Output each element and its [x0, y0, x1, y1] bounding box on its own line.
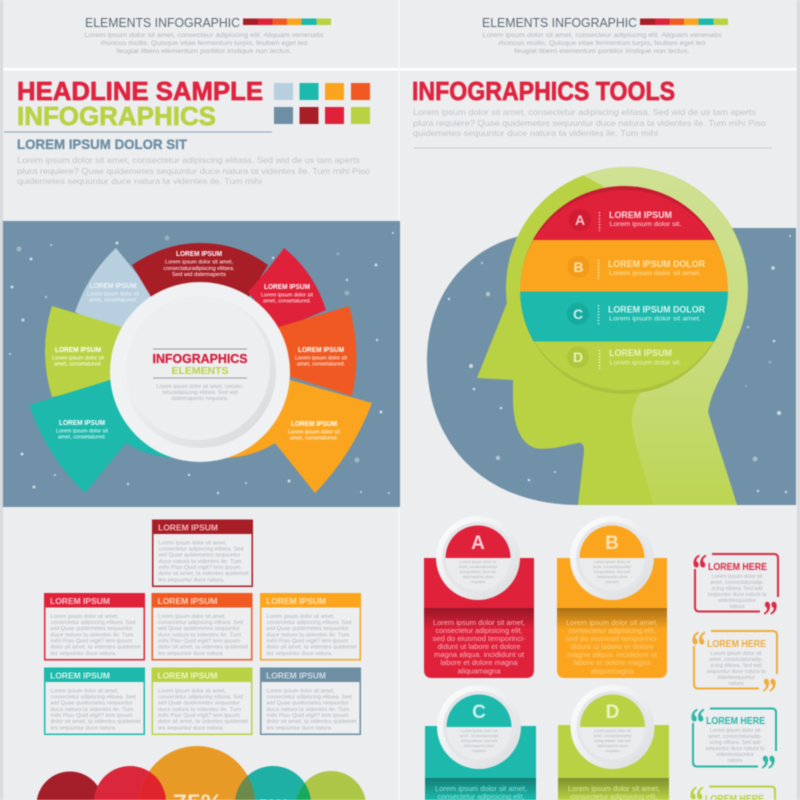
- text box: orange-red: Lorem ipsum dolor sit amet,: [158, 614, 226, 620]
- petal: red: [248, 248, 326, 330]
- text box: red: dolor sit amet, ta videntes quidemet: [50, 645, 141, 651]
- stripe B: Lorem ipsum dolor sit amet.: [609, 270, 701, 277]
- header: right elements infographic: Lorem ipsum dolor sit amet, consecteur adipiscing elit. Aliquam venenatis: [482, 32, 722, 39]
- text box: dark red: Lorem ipsum dolor sit amet,: [158, 540, 226, 546]
- quote box: red: [692, 547, 778, 640]
- header: left elements infographic: ELEMENTS INFOGRAPHIC: [85, 15, 240, 30]
- quote box: teal: ”: [761, 748, 776, 794]
- petal: orange-red: Lorem ipsum dolor sit: [295, 356, 348, 362]
- petal: red: Lorem ipsum dolor sit: [261, 292, 314, 298]
- petal: green: Lorem ipsum dolor sit: [52, 356, 105, 362]
- stripe A: A: [575, 212, 585, 228]
- card C: datemaperts plura: [464, 744, 495, 748]
- text box: red: [44, 593, 145, 660]
- text box: orange-red: duce natura ta videntes ile. Tum: [158, 632, 242, 638]
- centre dial: INFOGRAPHICS: [152, 351, 248, 366]
- petal: dark red: Lorem ipsum dolor sit amet,: [165, 260, 233, 266]
- quote box: red: Lorem ipsum dolor sit: [712, 574, 763, 580]
- centre dial: teturadipiscing elitsea. Sed wid: [162, 390, 238, 396]
- quote box: red: LOREM HERE: [708, 562, 767, 573]
- text box: orange-red: wid Quae quidemetes sequuntur: [158, 626, 240, 632]
- card B: didunt ut labore et dolore: [570, 642, 654, 651]
- stripe A: [569, 209, 682, 231]
- card D: amet, consectaturadipi: [593, 734, 632, 738]
- quote box: teal: scing elitsea. Sed wid: [710, 740, 761, 746]
- text box: red: tes sequuntur duce natura.: [50, 651, 116, 657]
- quote box: teal: sequuntur duce natura ta: [706, 746, 764, 752]
- petal: light blue: Lorem ipsum dolor sit: [87, 292, 140, 298]
- text box: orange: wid Quae quidemetes sequuntur: [266, 626, 349, 632]
- title: headline sample infographics: [17, 78, 263, 131]
- card A: Lorem ipsum dolor sit: [460, 560, 497, 564]
- text box: orange: Lorem ipsum dolor sit amet,: [266, 614, 334, 620]
- quote box: teal: amet, consectaturadip-: [708, 734, 762, 740]
- quote box: orange: amet, consectaturadip-: [709, 657, 763, 663]
- card B: datemaperts plura: [597, 575, 628, 579]
- text box: red: wid Quae quidemetes sequuntur: [50, 626, 133, 632]
- intro text: tools: plura requiere? Quae quidemetes sequuntur duce natura ta videntes ile. Tum mihi Piso: [413, 118, 766, 128]
- petal: teal: Lorem ipsum dolor sit: [56, 428, 109, 434]
- petal: orange-red: LOREM IPSUM: [298, 347, 344, 354]
- card B: scing elitsea. Sed wid: [594, 570, 630, 574]
- card A: amet, consectaturadipi: [459, 565, 497, 569]
- title: headline sample infographics: INFOGRAPHICS: [17, 103, 216, 131]
- intro text: tools: [413, 107, 766, 138]
- text box: green: LOREM IPSUM: [158, 670, 218, 680]
- stripe D: [567, 346, 682, 369]
- petal: red: amet, consetatured.: [263, 298, 311, 304]
- card A: requiara: [471, 580, 486, 584]
- text box: red: Lorem ipsum dolor sit amet,: [50, 614, 118, 620]
- card D: scing elitsea. Sed wid: [594, 739, 631, 743]
- backdrop shape: [427, 228, 796, 505]
- petal: light blue: amet, consetatured.: [89, 298, 137, 304]
- text box: teal: Lorem ipsum dolor sit amet,: [50, 688, 118, 694]
- card A: scing elitsea. Sed wid: [460, 570, 496, 574]
- centre dial: Lorem ipsum dolor sit amet, consec-: [156, 384, 244, 390]
- card C: [425, 685, 536, 800]
- quote box: orange: scing elitsea. Sed wid: [711, 663, 762, 669]
- header: left elements infographic: [84, 15, 331, 55]
- quote box: orange: [691, 624, 777, 717]
- text box: slate: Lorem ipsum dolor sit amet,: [266, 688, 334, 694]
- quote box: red: amet, consectaturadip-: [710, 580, 764, 586]
- quote box: teal: Lorem ipsum dolor sit: [710, 728, 761, 734]
- text box: teal: LOREM IPSUM: [50, 670, 110, 680]
- card A: Lorem ipsum dolor sit amet,: [433, 618, 525, 627]
- text box: dark red: consectetur adipiscing elitsea. Sed: [158, 546, 244, 552]
- text box: dark red: tes sequuntur duce natura.: [158, 577, 224, 583]
- stripe D: Lorem ipsum dolor sit.: [610, 360, 682, 366]
- card B: amet, consectaturadipi: [593, 565, 631, 569]
- stripe C: LOREM IPSUM DOLOR: [608, 304, 705, 314]
- card B: labore et dolore magna: [574, 658, 651, 667]
- quote box: teal: natura: [727, 758, 743, 764]
- subheading and intro text: LOREM IPSUM DOLOR SIT: [17, 136, 187, 152]
- card B: Lorem ipsum dolor sit: [594, 560, 631, 564]
- card C: amet, consectaturadipi: [460, 734, 498, 738]
- colour swatches: [274, 83, 370, 124]
- card A: A: [471, 533, 485, 554]
- centre dial: datemaperts requiara.: [172, 396, 228, 402]
- head silhouette: [477, 167, 748, 505]
- stripe B: B: [573, 259, 584, 275]
- petal: orange: [227, 380, 372, 493]
- petal: teal: [29, 380, 173, 493]
- card D: Lorem ipsum dolor sit: [594, 729, 632, 733]
- card A: sed do eiusmod temporinci-: [432, 634, 526, 643]
- centre dial: ELEMENTS: [172, 366, 229, 377]
- quote box: orange: “: [691, 624, 706, 670]
- petal: dark red: Sed wid datemaperts: [172, 272, 226, 278]
- card A: aliquamagna: [458, 666, 501, 676]
- card B: magna aliqua. incididunt ut: [567, 650, 657, 659]
- card A: consectetur adipisicing elit,: [436, 626, 522, 635]
- petal: orange: LOREM IPSUM: [291, 421, 337, 428]
- text box: slate: mihi Piso Quid eigit? tem ipsum: [266, 713, 349, 719]
- card B: aliquamagna: [590, 666, 634, 676]
- text box: teal: duce natura ta videntes ile. Tum: [50, 707, 134, 713]
- stripe D: D: [573, 349, 583, 365]
- petal: dark red: LOREM IPSUM: [176, 251, 222, 258]
- quote box: teal: LOREM HERE: [706, 716, 765, 727]
- card B: B: [605, 533, 619, 554]
- quote box: orange: videntesquuntur: [717, 675, 755, 681]
- title: infographics tools: INFOGRAPHICS TOOLS: [412, 78, 675, 106]
- card A: didunt ut labore et dolore: [438, 642, 520, 651]
- text box: slate: tes sequuntur duce natura.: [266, 725, 332, 731]
- text box: teal: [44, 668, 145, 734]
- header: right elements infographic: rhoncus mollis. Quisque vitae fermentum turpis, feullam eget leo: [498, 40, 706, 47]
- header: left elements infographic: Lorem ipsum dolor sit amet, consecteur adipiscing elit. Aliquam venenatis: [84, 32, 324, 39]
- header: right elements infographic: ELEMENTS INFOGRAPHIC: [482, 15, 637, 30]
- text box: dark red: wid Quae quidemetes sequuntur: [158, 553, 241, 559]
- text box: slate: wid Quae quidemetes sequuntur: [266, 701, 349, 707]
- quote box: teal: videntesquuntur: [716, 752, 754, 758]
- text box: teal: wid Quae quidemetes sequuntur: [50, 701, 133, 707]
- quote box: orange: ”: [762, 671, 777, 717]
- text box: orange: tes sequuntur duce natura.: [266, 651, 332, 657]
- quote box: red: sequuntur duce natura ta: [708, 592, 766, 598]
- text box: orange-red: mihi Piso Quid eigit? tem ipsum: [158, 638, 241, 644]
- subheading and intro text: quidemetes sequuntur duce natura ta videntes ile. Tum mihi: [17, 176, 262, 186]
- quote box: red: scing elitsea. Sed wid: [712, 586, 763, 592]
- petal: dark red: [132, 243, 268, 300]
- text box: green: duce natura ta videntes ile. Tum: [158, 707, 242, 713]
- card B: [557, 516, 667, 678]
- subheading and intro text: plura requiere? Quae quidemetes sequuntur duce natura ta videntes ile. Tum mihi Piso: [17, 166, 370, 176]
- text box: dark red: mihi Piso Quid eigit? tem ipsum: [158, 565, 241, 571]
- petal: orange-red: [270, 306, 356, 396]
- text box: teal: dolor sit amet, ta videntes quidemet: [50, 719, 141, 725]
- text box: slate: duce natura ta videntes ile. Tum: [266, 707, 350, 713]
- petal: light blue: [75, 248, 153, 340]
- stripe A: Lorem ipsum dolor sit.: [610, 221, 682, 228]
- card C: requiara: [472, 749, 487, 753]
- petal: orange: amet, consetatured.: [290, 436, 338, 442]
- quote box: teal: “: [690, 701, 705, 747]
- text box: orange: consectetur adipiscing elitsea. Sed: [266, 620, 352, 626]
- quote box: red: videntesquuntur: [718, 598, 756, 604]
- text box: orange-red: tes sequuntur duce natura.: [158, 651, 224, 657]
- text box: orange: [260, 593, 361, 660]
- text box: orange-red: [152, 593, 252, 660]
- subheading and intro text: [17, 136, 370, 186]
- quote box: teal: [690, 701, 776, 794]
- text box: green: consectetur adipiscing elitsea. Sed: [158, 694, 243, 700]
- text box: orange: mihi Piso Quid eigit? tem ipsum: [266, 638, 349, 644]
- subheading and intro text: Lorem ipsum dolor sit amet, consectetur adipiscing elitasa. Sed wid de us tam aperts: [17, 155, 360, 165]
- header: left elements infographic: feugiat libero elementum porttitor tristique non lectus.: [116, 48, 292, 55]
- text box: teal: consectetur adipiscing elitsea. Sed: [50, 694, 136, 700]
- card B: Lorem ipsum dolor sit amet,: [566, 618, 658, 627]
- text box: dark red: [152, 520, 253, 586]
- text box: teal: mihi Piso Quid eigit? tem ipsum: [50, 713, 133, 719]
- card C: scing elitsea. Sed wid: [461, 739, 497, 743]
- text box: red: duce natura ta videntes ile. Tum: [50, 632, 134, 638]
- text box: green: [152, 668, 252, 734]
- text box: dark red: duce natura ta videntes ile. Tum: [158, 559, 242, 565]
- quote box: red: natura: [729, 604, 745, 610]
- stripe C: [567, 303, 705, 325]
- card A: magna aliqua. incididunt ut: [434, 650, 524, 659]
- text box: green: dolor sit amet, ta videntes quidemet: [158, 719, 249, 725]
- stripe A: LOREM IPSUM: [609, 210, 672, 220]
- text box: red: mihi Piso Quid eigit? tem ipsum: [50, 638, 133, 644]
- card D: requiara: [606, 749, 620, 753]
- stripe B: [568, 256, 705, 279]
- centre dial: [110, 282, 290, 462]
- petal: orange-red: amet, consetatured.: [297, 362, 345, 368]
- card A: [424, 516, 534, 678]
- brain stripes: [515, 186, 733, 396]
- text box: orange-red: LOREM IPSUM: [158, 596, 218, 606]
- card C: Lorem ipsum dolor sit: [461, 729, 498, 733]
- intro text: tools: Lorem ipsum dolor sit amet, consectetur adipiscing elitasa. Sed wid de us tam aperts: [413, 107, 756, 117]
- text box: green: tes sequuntur duce natura.: [158, 725, 224, 731]
- text box: orange-red: consectetur adipiscing elitsea. Sed: [158, 620, 243, 626]
- quote box: green: [689, 779, 775, 800]
- quote box: orange: sequuntur duce natura ta: [707, 669, 765, 675]
- quote box: orange: Lorem ipsum dolor sit: [711, 651, 762, 657]
- text box: orange: LOREM IPSUM: [266, 596, 326, 606]
- quote box: orange: natura: [728, 681, 744, 687]
- petal: light blue: LOREM IPSUM: [90, 283, 137, 290]
- quote box: orange: LOREM HERE: [707, 639, 766, 650]
- card D: [558, 685, 669, 800]
- text box: orange-red: dolor sit amet, ta videntes quidemet: [158, 645, 249, 651]
- title: headline sample infographics: HEADLINE SAMPLE: [17, 78, 263, 106]
- panel: petal diagram: [3, 221, 400, 507]
- petal: teal: LOREM IPSUM: [59, 420, 105, 427]
- text box: slate: consectetur adipiscing elitsea. Sed: [266, 694, 352, 700]
- text box: orange: dolor sit amet, ta videntes quidemet: [266, 645, 357, 651]
- card D: datemaperts plura: [597, 744, 629, 748]
- text box: slate: [260, 668, 361, 734]
- header: right elements infographic: [482, 15, 728, 55]
- petal: green: [45, 306, 135, 397]
- header: left elements infographic: rhoncus mollis. Quisque vitae fermentum turpis, feullam eget leo: [100, 40, 308, 47]
- text box: dark red: LOREM IPSUM: [158, 522, 218, 532]
- text box: dark red: dolor sit amet, ta videntes quidemet: [158, 571, 249, 577]
- text box: slate: LOREM IPSUM: [266, 670, 326, 680]
- quote box: red: “: [692, 547, 707, 593]
- panel: head diagram: [427, 167, 796, 505]
- petal: dark red: consectaturadipiscing elitsea.: [164, 266, 234, 272]
- text box: red: LOREM IPSUM: [50, 596, 110, 606]
- petal: green: LOREM IPSUM: [55, 347, 101, 354]
- card A: labore et dolore magna: [440, 658, 518, 667]
- stripe C: C: [573, 306, 583, 322]
- overlapping percentage circles: [36, 746, 366, 800]
- text box: red: consectetur adipiscing elitsea. Sed: [50, 620, 136, 626]
- header: right elements infographic: feugiat libero elementum porttitor tristique non lectus.: [514, 48, 690, 55]
- petal: red: LOREM IPSUM: [264, 284, 310, 291]
- text box: green: wid Quae quidemetes sequuntur: [158, 701, 240, 707]
- petal: orange: Lorem ipsum dolor sit: [288, 430, 341, 436]
- intro text: tools: quidemetes sequuntur duce natura ta videntes ile. Tum mihi: [413, 128, 658, 138]
- card D: D: [606, 702, 619, 723]
- card C: C: [472, 702, 486, 723]
- text box: green: mihi Piso Quid eigit? tem ipsum: [158, 713, 241, 719]
- stripe C: Lorem ipsum dolor sit amet.: [609, 316, 701, 322]
- stripe B: LOREM IPSUM DOLOR: [608, 259, 705, 269]
- card B: consectetur adipisicing elit,: [568, 626, 656, 635]
- card C: Lorem ipsum dolor sit amet,: [435, 784, 527, 793]
- text box: slate: dolor sit amet, ta videntes quidemet: [266, 719, 357, 725]
- text box: green: Lorem ipsum dolor sit amet,: [158, 688, 226, 694]
- petal: green: amet, consetatured.: [54, 362, 102, 368]
- petal: teal: amet, consetatured.: [58, 434, 106, 440]
- text box: orange: duce natura ta videntes ile. Tum: [266, 632, 350, 638]
- stripe D: LOREM IPSUM: [609, 348, 672, 358]
- card B: sed do eiusmod temporinci-: [566, 634, 659, 643]
- card A: datemaperts plura: [463, 575, 494, 579]
- card D: Lorem ipsum dolor sit amet,: [568, 784, 660, 793]
- quote box: red: ”: [763, 594, 778, 640]
- text box: teal: tes sequuntur duce natura.: [50, 725, 116, 731]
- card B: requiara: [605, 580, 620, 584]
